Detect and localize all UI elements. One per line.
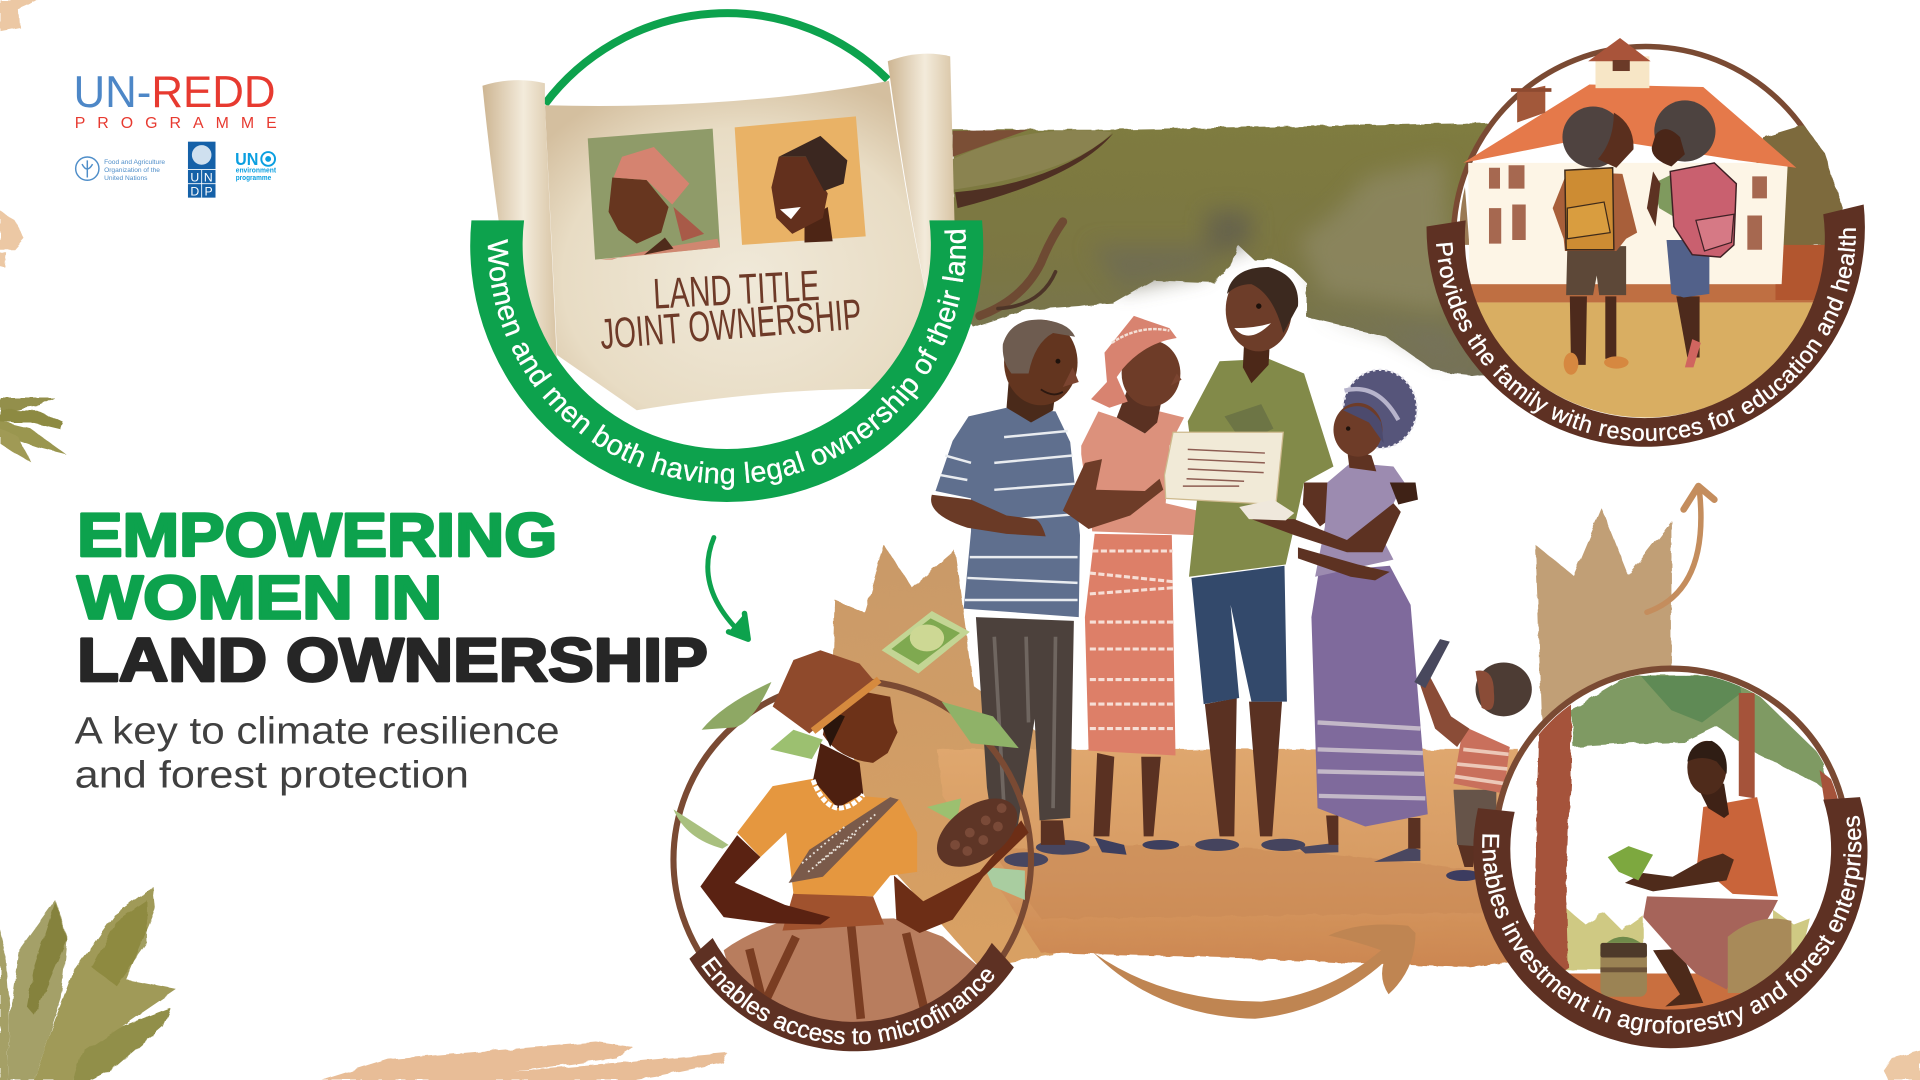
- arrow: brown bottom: [1093, 924, 1416, 1019]
- FAO logo: [76, 157, 165, 182]
- thin ring: [1453, 47, 1838, 431]
- portrait: man: [735, 116, 866, 245]
- banner text: green: Women and men both having legal ownership of their land: [488, 230, 966, 490]
- school illustration: [1451, 38, 1837, 425]
- document heading: LAND TITLE: [652, 262, 821, 319]
- banner: education: [1427, 204, 1865, 447]
- woman with cocoa: [700, 650, 1030, 1029]
- FAO logo: United Nations: [104, 175, 148, 182]
- UN environment logo: programme: [236, 174, 271, 182]
- brush stroke: bottom centre: [322, 1042, 727, 1080]
- FAO logo: Organization of the: [104, 167, 160, 174]
- panel: agroforestry circle: [1473, 666, 1868, 1048]
- canopy branch: upper leaf: [953, 130, 1113, 208]
- illustration: right bush: [1536, 508, 1671, 759]
- child: left with yellow backpack: [1553, 107, 1637, 375]
- thin ring: [673, 681, 1031, 1038]
- tree beside school: [1751, 125, 1845, 246]
- banner: agroforestry: [1473, 797, 1868, 1048]
- document heading: [598, 262, 863, 359]
- canopy branch: lower: [980, 222, 1063, 316]
- subtitle: [75, 710, 560, 796]
- portrait: woman: [588, 129, 720, 260]
- panel: land title scroll: [470, 9, 984, 502]
- plant: bottom left palm: [0, 887, 176, 1080]
- brush stroke: bottom right: [1883, 1051, 1920, 1080]
- UNDP logo: [188, 142, 216, 198]
- scroll roll: left: [482, 80, 557, 367]
- UN environment logo: [235, 149, 277, 182]
- programme wordmark: PROGRAMME: [75, 115, 277, 132]
- title: LAND OWNERSHIP: [77, 626, 708, 694]
- illustration: ground: [937, 749, 1518, 967]
- subtitle: and forest protection: [75, 754, 469, 796]
- title: EMPOWERING: [77, 501, 557, 569]
- UNDP logo: N: [204, 171, 213, 185]
- subtitle: A key to climate resilience: [75, 710, 560, 752]
- illustration: left bush: [833, 545, 1053, 967]
- illustration: family holding land title: [931, 267, 1532, 881]
- banner: microfinance: [689, 938, 1014, 1051]
- parchment sheet: [545, 81, 943, 410]
- arrow: brown to top right: [1647, 486, 1714, 612]
- UNDP logo: D: [190, 184, 199, 198]
- UNDP logo: U: [190, 171, 199, 185]
- figure: man in striped shirt: [931, 320, 1090, 867]
- land title document: [1164, 432, 1283, 504]
- panel: education circle: [1426, 38, 1865, 447]
- UNDP logo: P: [204, 184, 213, 198]
- UN environment logo: environment: [236, 167, 277, 175]
- banner text: agroforestry: Enables investment in agroforestry and forest enterprises: [1482, 816, 1864, 1036]
- illustration: tree canopy: [953, 122, 1518, 380]
- panel: microfinance circle: [670, 611, 1034, 1052]
- banner: green: [470, 220, 983, 502]
- banner text: microfinance: Enables access to microfinance: [701, 956, 994, 1044]
- white disc: [1495, 669, 1848, 1021]
- figure: woman in pink dress: [1063, 316, 1198, 855]
- plant: small left leaf: [0, 398, 66, 463]
- brush stroke: top left: [0, 0, 38, 267]
- wordmark: UN-REDD: [73, 68, 276, 117]
- thin green ring: [545, 13, 888, 104]
- banner text: education: Provides the family with resources for education and health: [1436, 228, 1856, 442]
- child: right with pink backpack: [1647, 100, 1736, 367]
- sacks: [724, 918, 980, 1029]
- arrow: green to microfinance: [708, 538, 748, 639]
- title: WOMEN IN: [77, 563, 442, 631]
- figure: tall man in olive shirt: [1188, 267, 1333, 851]
- canopy shading: [1090, 159, 1451, 361]
- document heading: JOINT OWNERSHIP: [598, 291, 863, 359]
- flying banknotes: [673, 611, 1025, 900]
- scroll roll: right: [888, 54, 955, 367]
- figure: child with phone: [1414, 639, 1532, 881]
- logo: UN-REDD programme: [73, 68, 277, 198]
- title: [77, 501, 708, 694]
- FAO logo: Food and Agriculture: [104, 159, 165, 166]
- farm illustration: [1531, 676, 1843, 1029]
- figure: woman in purple dress: [1239, 370, 1428, 862]
- UN environment logo: UN: [235, 149, 258, 169]
